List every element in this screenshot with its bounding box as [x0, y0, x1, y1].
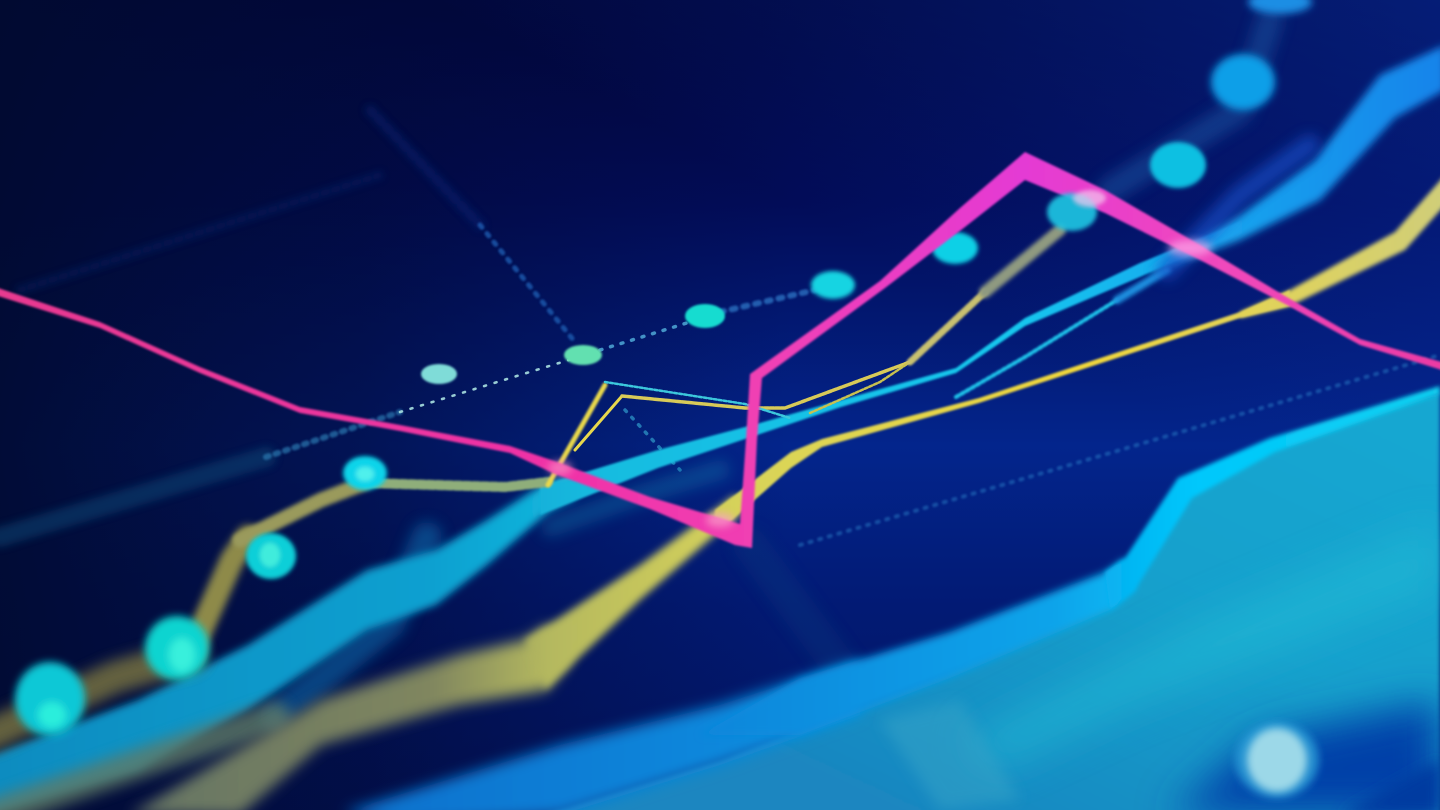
- point: centre right: [685, 304, 725, 328]
- point: upper right: [1150, 142, 1206, 188]
- point: by pink line: [932, 232, 978, 264]
- dotted grid lines: [0, 110, 1440, 680]
- line: cyan dotted series: [956, 300, 1117, 397]
- line: yellow series: [0, 175, 1440, 810]
- point: right of centre: [811, 271, 855, 299]
- point: left: [246, 533, 296, 579]
- point: top edge: [1248, 0, 1312, 14]
- area chart: lower right: [344, 386, 1440, 810]
- line: pink series: [0, 152, 1440, 548]
- point: far left: [15, 662, 85, 736]
- point: centre left: [421, 364, 457, 384]
- point: lower left: [145, 616, 209, 680]
- point: centre: [564, 345, 602, 365]
- point: bottom right glow: [1235, 722, 1319, 798]
- area chart outline: [344, 386, 1440, 810]
- line: olive series: [0, 20, 1270, 735]
- point: top right: [1211, 54, 1275, 110]
- pink line highlights: [548, 240, 1212, 527]
- point: under pink peak: [1047, 190, 1106, 231]
- point: mid left: [343, 456, 387, 490]
